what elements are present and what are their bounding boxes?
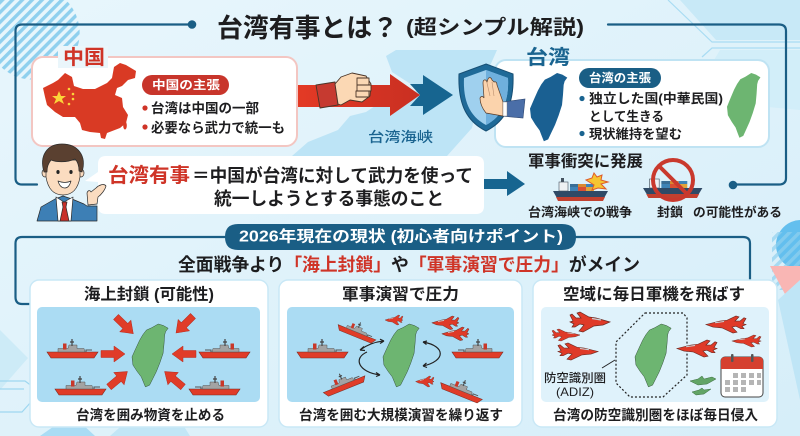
- icon: Taiwan map blue: [530, 73, 567, 141]
- icon: shield with hand: [459, 64, 525, 131]
- speech bubble: ＝中国が台湾に対して武力を使って: [192, 165, 473, 186]
- text: China claims: [142, 100, 285, 136]
- badge: China claim: 中国の主張: [152, 77, 220, 92]
- panel: blockade: [30, 280, 268, 427]
- text: China claims: 必要なら武力で統一も: [151, 120, 285, 136]
- icon: Taiwan map green: [727, 73, 760, 138]
- label: ADIZ: (ADIZ): [556, 385, 594, 399]
- title: (超シンプル解説): [406, 16, 584, 39]
- text: Taiwan claims: 現状維持を望む: [589, 126, 682, 142]
- badge: Taiwan claim: [579, 68, 661, 88]
- text: Taiwan claims: として生きる: [589, 109, 664, 124]
- panel: Taiwan: [495, 46, 769, 147]
- title: [217, 13, 584, 43]
- caption: exercises: 台湾を囲む大規模演習を繰り返す: [299, 407, 503, 423]
- panel: military exercises: [279, 280, 522, 427]
- arrow: red force arrow: [298, 74, 420, 116]
- arrow: blue strait arrow: [410, 75, 453, 115]
- headline: 全面戦争より「海上封鎖」や「軍事演習で圧力」がメイン: [178, 254, 640, 275]
- heading: blockade: 海上封鎖 (可能性): [84, 284, 214, 304]
- icon: blocked ship: [643, 160, 702, 200]
- label: Taiwan Strait: 台湾海峡: [368, 129, 433, 145]
- heading: military conflict: 軍事衝突に発展: [528, 152, 643, 170]
- text: Taiwan claims: [579, 91, 723, 142]
- label: ADIZ: 防空識別圏: [544, 370, 606, 385]
- icon: ship with explosion: [553, 173, 608, 201]
- heading: exercises: 軍事演習で圧力: [342, 284, 459, 304]
- text: possible outcomes: の可能性がある: [693, 204, 782, 220]
- badge: 2026 status: [225, 224, 576, 250]
- text: Taiwan claims: 独立した国(中華民国): [589, 91, 723, 106]
- speech bubble: 台湾有事: [108, 164, 190, 187]
- panel: China: [32, 46, 297, 146]
- speech bubble: [85, 156, 484, 214]
- icon: calendar: [721, 354, 763, 397]
- bottom frame line: [16, 237, 750, 304]
- icon: fist: [316, 73, 371, 108]
- badge: China claim: [142, 75, 229, 95]
- badge: 2026 status: 2026年現在の現状 (初心者向けポイント): [239, 226, 563, 246]
- title: 台湾有事とは？: [217, 13, 398, 43]
- arrow: to conflict: [484, 171, 525, 196]
- text: possible outcomes: [528, 204, 782, 220]
- heading: airspace: 空域に毎日軍機を飛ばす: [563, 284, 745, 304]
- caption: airspace: 台湾の防空識別圏をほぼ毎日侵入: [553, 407, 758, 423]
- badge: Taiwan claim: 台湾の主張: [589, 70, 651, 85]
- panel: airspace: [533, 280, 777, 427]
- icon: China map: [43, 63, 136, 139]
- heading: Taiwan: 台湾: [526, 46, 570, 69]
- strait map background: [292, 50, 497, 156]
- heading: China: 中国: [63, 46, 105, 69]
- speech bubble: 統一しようとする事態のこと: [214, 188, 444, 209]
- label: ADIZ: [544, 370, 606, 399]
- text: possible outcomes: 封鎖: [657, 204, 684, 220]
- icon: presenter: [37, 144, 106, 221]
- text: possible outcomes: 台湾海峡での戦争: [528, 204, 633, 220]
- top frame line: [16, 20, 786, 189]
- caption: blockade: 台湾を囲み物資を止める: [76, 407, 225, 423]
- text: China claims: 台湾は中国の一部: [151, 100, 259, 116]
